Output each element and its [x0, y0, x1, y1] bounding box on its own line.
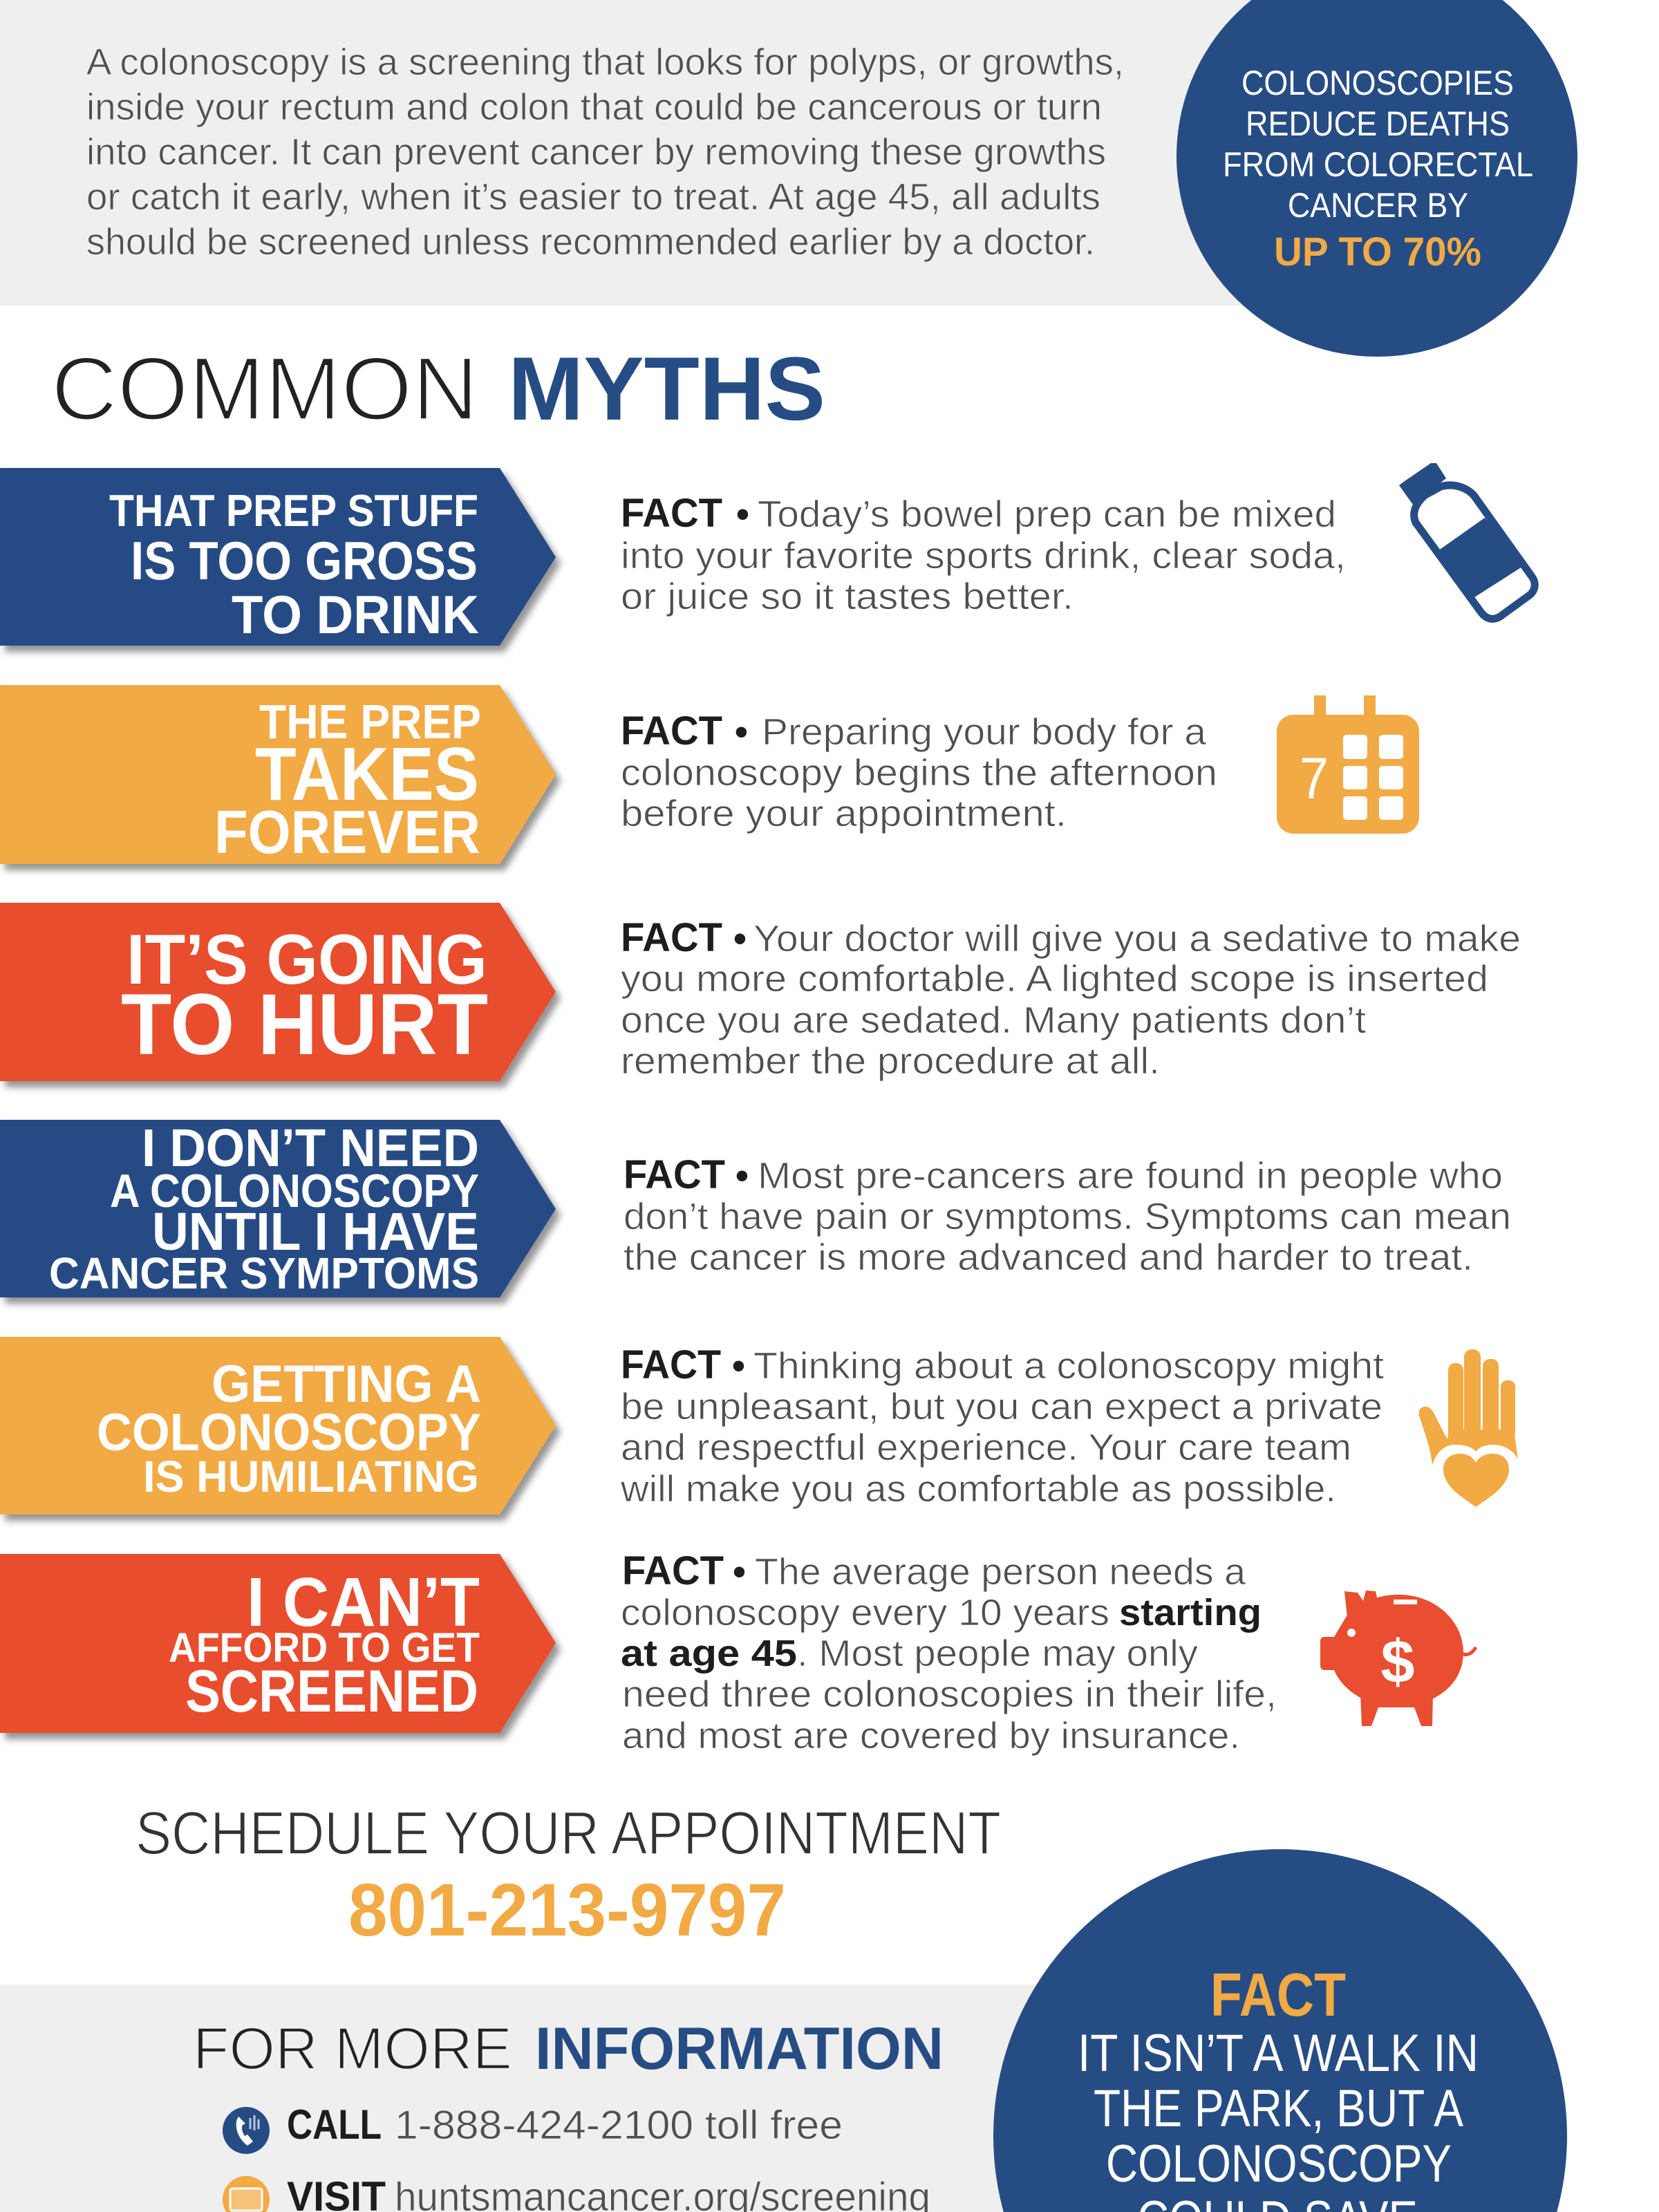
- myth arrow: no symptoms: A COLONOSCOPY: [110, 1165, 479, 1217]
- icon: bottle: [1399, 463, 1535, 619]
- fact: bowel prep: FACT: [621, 491, 722, 536]
- fact: pre-cancers: Most pre-cancers are found in people who: [758, 1155, 1503, 1197]
- fact: sedative: FACT: [621, 915, 722, 960]
- intro text: [86, 41, 1124, 263]
- fact: pre-cancers: FACT: [624, 1152, 725, 1197]
- myth arrow: prep takes forever: THE PREP: [259, 695, 481, 749]
- fact: cost and frequency: The average person needs a: [755, 1551, 1246, 1593]
- fact: cost and frequency: FACT: [622, 1548, 724, 1593]
- intro text: or catch it early, when it’s easier to treat. At age 45, all adults: [86, 176, 1100, 218]
- callout: reduce deaths circle: UP TO 70%: [1274, 229, 1481, 274]
- fact: respectful experience: and respectful experience. Your care team: [621, 1427, 1351, 1468]
- fact: preparing body: FACT: [621, 709, 722, 753]
- myth arrow: no symptoms: [0, 1118, 556, 1298]
- myth arrow: prep takes forever: TAKES: [255, 732, 479, 816]
- intro text: A colonoscopy is a screening that looks for polyps, or growths,: [86, 41, 1124, 83]
- fact: preparing body: before your appointment.: [621, 793, 1067, 834]
- myth arrow: prep too gross: THAT PREP STUFF: [109, 485, 478, 536]
- fact: pre-cancers: •: [735, 1155, 749, 1197]
- fact: preparing body: colonoscopy begins the afternoon: [621, 752, 1217, 794]
- callout: fact circle: FACT: [1210, 1960, 1346, 2029]
- heading: common myths: MYTHS: [508, 338, 825, 439]
- myth arrow: no symptoms: UNTIL I HAVE: [152, 1202, 479, 1262]
- call to action: schedule appointment: 801-213-9797: [348, 1868, 786, 1951]
- heading: for more information: FOR MORE: [193, 2016, 512, 2082]
- fact: cost and frequency: colonoscopy every 10 years: [621, 1592, 1109, 1633]
- fact: preparing body: Preparing your body for a: [762, 711, 1207, 753]
- fact: pre-cancers: [624, 1152, 1511, 1278]
- myth arrow: humiliating: [0, 1337, 556, 1515]
- fact: respectful experience: be unpleasant, but you can expect a private: [621, 1386, 1382, 1427]
- myth arrow: no symptoms: I DON’T NEED: [142, 1118, 479, 1178]
- fact: respectful experience: •: [732, 1345, 745, 1387]
- callout: reduce deaths circle: COLONOSCOPIES: [1241, 64, 1514, 102]
- callout: fact circle: [993, 1849, 1567, 2212]
- myth arrow: no symptoms: CANCER SYMPTOMS: [49, 1248, 479, 1298]
- fact: bowel prep: into your favorite sports drink, clear soda,: [621, 535, 1346, 577]
- fact: sedative: you more comfortable. A lighted scope is inserted: [621, 958, 1488, 1000]
- myth arrow: can't afford: SCREENED: [185, 1658, 478, 1725]
- icon: tablet: [223, 2176, 270, 2212]
- heading: common myths: [51, 338, 825, 439]
- heading: for more information: INFORMATION: [535, 2016, 944, 2082]
- icon: hand with heart: [1419, 1349, 1518, 1507]
- myth arrow: prep takes forever: FOREVER: [214, 798, 480, 866]
- callout: fact circle: COLONOSCOPY: [1106, 2135, 1452, 2193]
- fact: pre-cancers: the cancer is more advanced and harder to treat.: [624, 1237, 1473, 1278]
- myth arrow: prep too gross: [0, 468, 556, 646]
- myth arrow: can't afford: I CAN’T: [247, 1564, 480, 1641]
- callout: fact circle: THE PARK, BUT A: [1094, 2079, 1463, 2138]
- myth arrow: humiliating: COLONOSCOPY: [97, 1403, 481, 1462]
- myth arrow: prep takes forever: [0, 685, 556, 866]
- callout: reduce deaths circle: REDUCE DEATHS: [1246, 104, 1510, 143]
- icon: piggy bank: [1320, 1591, 1476, 1726]
- myth arrow: prep too gross: IS TOO GROSS: [131, 530, 478, 591]
- fact: cost and frequency: need three colonoscopies in their life,: [622, 1674, 1277, 1715]
- fact: preparing body: [621, 709, 1217, 834]
- fact: cost and frequency: •: [733, 1551, 746, 1593]
- panel: more information: [0, 1985, 1280, 2212]
- myth arrow: can't afford: [0, 1554, 556, 1733]
- intro text: into cancer. It can prevent cancer by removing these growths: [86, 131, 1106, 173]
- myth arrow: going to hurt: [0, 903, 556, 1081]
- intro text: inside your rectum and colon that could be cancerous or turn: [86, 86, 1102, 128]
- panel: intro band: [0, 0, 1377, 306]
- contact: call: CALL: [287, 2101, 382, 2148]
- fact: cost and frequency: starting: [1119, 1592, 1262, 1633]
- fact: cost and frequency: at age 45: [621, 1633, 797, 1674]
- icon: calendar: [1277, 695, 1419, 834]
- fact: sedative: remember the procedure at all.: [621, 1040, 1160, 1082]
- myth arrow: can't afford: AFFORD TO GET: [169, 1624, 480, 1671]
- myth arrow: going to hurt: TO HURT: [121, 977, 488, 1073]
- callout: fact circle: IT ISN’T A WALK IN: [1078, 2024, 1479, 2083]
- fact: respectful experience: Thinking about a colonoscopy might: [753, 1345, 1384, 1387]
- fact: respectful experience: [620, 1342, 1384, 1510]
- fact: sedative: [621, 915, 1521, 1082]
- myth arrow: going to hurt: IT’S GOING: [126, 920, 487, 999]
- fact: bowel prep: [621, 491, 1346, 617]
- fact: bowel prep: or juice so it tastes better.: [621, 576, 1074, 617]
- intro text: should be screened unless recommended earlier by a doctor.: [86, 221, 1095, 263]
- fact: respectful experience: will make you as comfortable as possible.: [620, 1468, 1336, 1510]
- fact: respectful experience: FACT: [621, 1342, 721, 1387]
- fact: sedative: once you are sedated. Many patients don’t: [621, 1000, 1366, 1041]
- callout: reduce deaths circle: CANCER BY: [1288, 186, 1468, 225]
- myth arrow: humiliating: IS HUMILIATING: [143, 1452, 479, 1501]
- callout: reduce deaths circle: FROM COLORECTAL: [1223, 145, 1533, 184]
- call to action: schedule appointment: [135, 1799, 1001, 1951]
- fact: cost and frequency: . Most people may only: [797, 1633, 1198, 1674]
- icon: calendar: 7: [1300, 746, 1329, 811]
- fact: sedative: Your doctor will give you a sedative to make: [753, 918, 1521, 959]
- heading: common myths: COMMON: [51, 338, 478, 439]
- fact: sedative: •: [733, 918, 747, 959]
- fact: pre-cancers: don’t have pain or symptoms. Symptoms can mean: [624, 1196, 1511, 1237]
- icon: phone: [223, 2107, 270, 2154]
- callout: reduce deaths circle: [1177, 0, 1577, 357]
- myth arrow: prep too gross: TO DRINK: [232, 584, 479, 645]
- icon: piggy bank: $: [1381, 1627, 1414, 1696]
- fact: cost and frequency: and most are covered by insurance.: [622, 1715, 1240, 1756]
- fact: bowel prep: •: [736, 494, 749, 535]
- fact: bowel prep: Today’s bowel prep can be mixed: [758, 494, 1336, 535]
- heading: for more information: [193, 2016, 944, 2082]
- contact: call: 1-888-424-2100 toll free: [395, 2103, 843, 2148]
- fact: preparing body: •: [735, 711, 748, 753]
- call to action: schedule appointment: SCHEDULE YOUR APPOINTMENT: [135, 1799, 1001, 1867]
- fact: cost and frequency: [621, 1548, 1277, 1756]
- myth arrow: humiliating: GETTING A: [212, 1355, 481, 1414]
